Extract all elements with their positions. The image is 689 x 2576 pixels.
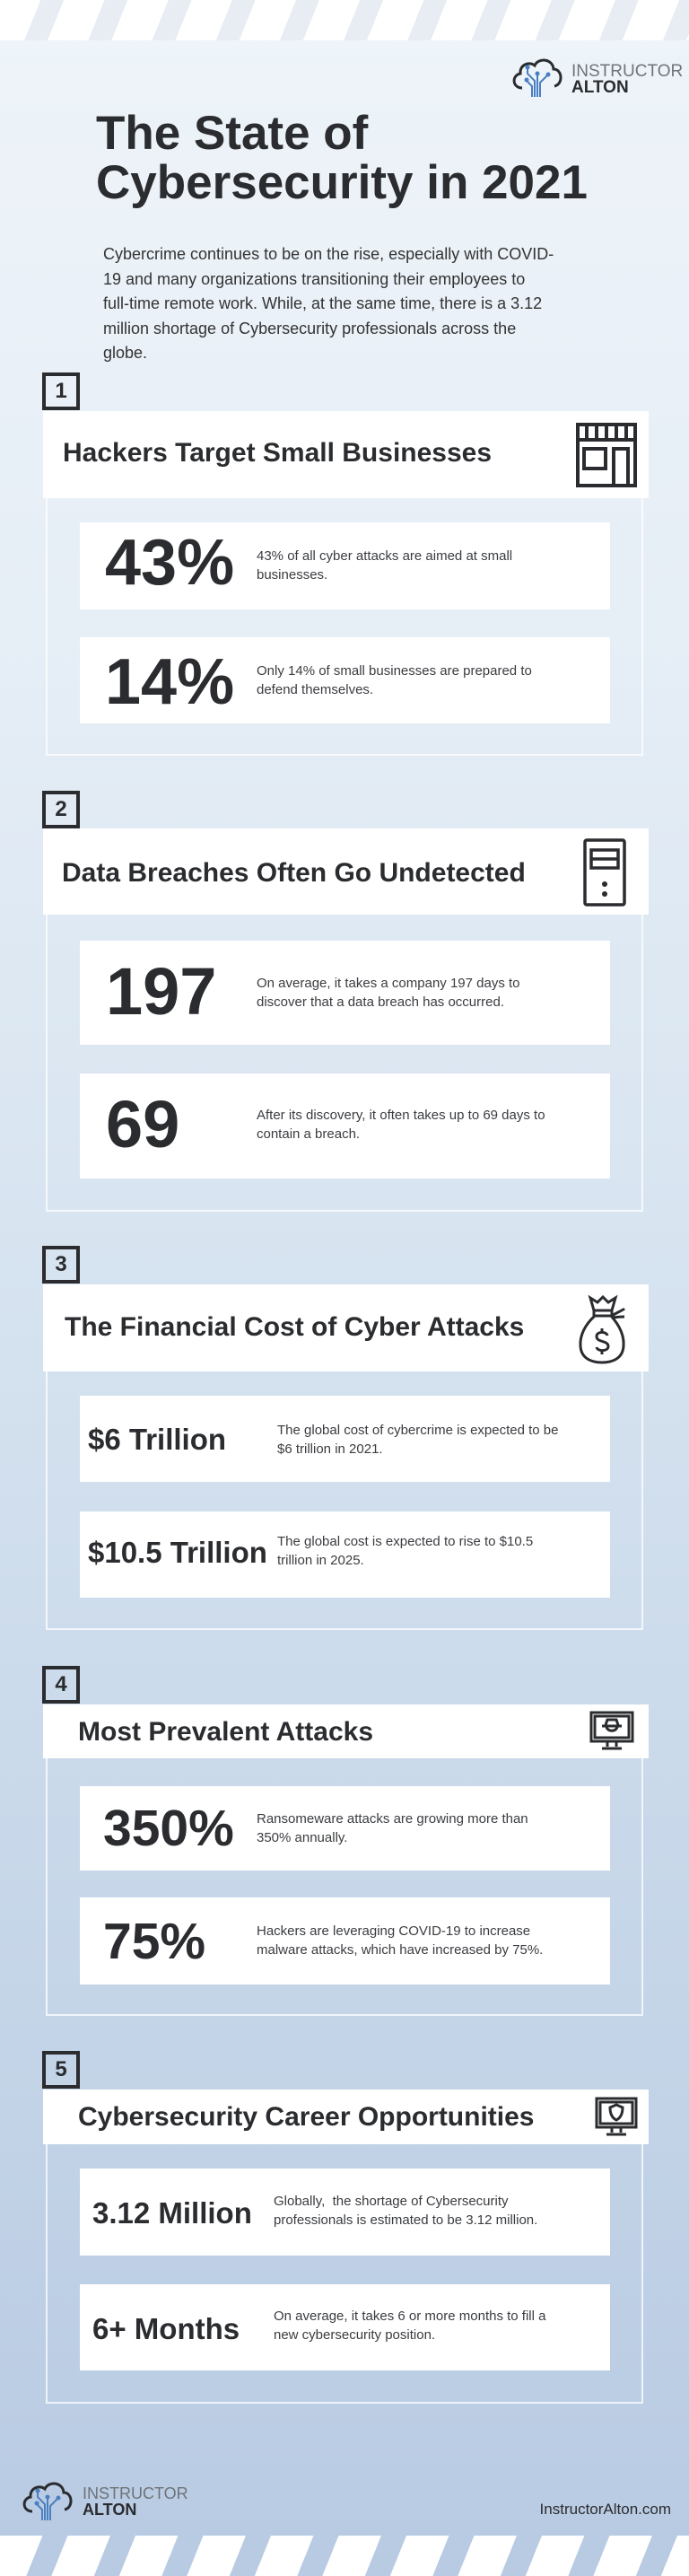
card: 14% [80,637,610,723]
section 1 panel [46,498,643,756]
icon: server [583,838,626,907]
title: Cybersecurity in 2021 [96,156,588,209]
footer logo [23,2483,188,2520]
logo: instructor alton (top): INSTRUCTOR [571,62,683,81]
card: 197 [80,941,610,1045]
logo: instructor alton (top): ALTON [571,78,629,97]
footer website: InstructorAlton.com [540,2501,671,2518]
card: 69 [80,1073,610,1178]
card: $10.5 Trillion: The global cost is expected to rise to $10.5 [277,1534,533,1549]
card: $6 Trillion: $6 Trillion [88,1423,226,1456]
card: 197: discover that a data breach has occurred. [257,994,504,1010]
card: 69: contain a breach. [257,1126,360,1142]
section 4 header: Most Prevalent Attacks [78,1717,373,1747]
intro paragraph [103,245,554,362]
card: 6+ Months: new cybersecurity position. [274,2327,435,2343]
logo: instructor alton (top) [513,59,683,97]
title: The State of [96,107,368,160]
section 1 number [42,372,80,410]
card: 3.12 Million: professionals is estimated to be 3.12 million. [274,2212,537,2228]
card: 6+ Months: On average, it takes 6 or more months to fill a [274,2309,545,2324]
card: 350%: 350% annually. [257,1830,347,1845]
card: 43%: 43% [105,527,234,599]
card: 75% [80,1897,610,1985]
card: 350%: Ransomeware attacks are growing more than [257,1811,528,1827]
footer logo: ALTON [83,2501,136,2519]
icon: store [576,423,637,487]
card: 14%: Only 14% of small businesses are prepared to [257,663,532,679]
bottom stripe band [0,2536,689,2576]
section 3 number [42,1246,80,1284]
icon: money bag [579,1294,625,1364]
icon: monitor hacker [590,1711,633,1750]
card: 14%: defend themselves. [257,682,373,697]
card: 69: 69 [106,1087,179,1161]
section 4 panel [46,1758,643,2016]
section 2 panel [46,915,643,1212]
card: 43%: businesses. [257,567,327,583]
footer logo: INSTRUCTOR [83,2484,188,2502]
card: $10.5 Trillion: trillion in 2025. [277,1553,364,1568]
top stripe band [0,0,689,40]
section 2 number: 2 [55,797,67,821]
intro paragraph: Cybercrime continues to be on the rise, especially with COVID- [103,245,554,263]
card: 3.12 Million: 3.12 Million [92,2196,252,2230]
section 5 header: Cybersecurity Career Opportunities [78,2102,535,2132]
section 4 number [42,1666,80,1704]
card: 43%: 43% of all cyber attacks are aimed at small [257,548,512,564]
card: 69: After its discovery, it often takes up to 69 days to [257,1108,545,1123]
intro paragraph: globe. [103,344,147,362]
card: $6 Trillion: The global cost of cybercrime is expected to be [277,1423,558,1438]
card: $6 Trillion [80,1396,610,1482]
section 2 header [43,828,649,915]
card: $10.5 Trillion: $10.5 Trillion [88,1536,267,1569]
card: 197: 197 [106,954,216,1029]
card: 6+ Months: 6+ Months [92,2312,240,2345]
card: 3.12 Million [80,2169,610,2256]
intro paragraph: 19 and many organizations transitioning their employees to [103,269,525,287]
section 1 number: 1 [55,379,67,403]
section 3 number: 3 [55,1252,67,1276]
card: 75%: malware attacks, which have increased by 75%. [257,1942,543,1958]
card: 350%: 350% [103,1800,234,1857]
section 3 header [43,1284,649,1371]
section 2 number [42,791,80,828]
card: 75%: Hackers are leveraging COVID-19 to increase [257,1923,530,1939]
section 5 number [42,2051,80,2089]
section 1 header: Hackers Target Small Businesses [63,438,492,468]
card: $10.5 Trillion [80,1511,610,1598]
section 4 header [43,1704,649,1758]
section 4 number: 4 [55,1672,67,1696]
section 1 header [43,411,649,498]
intro paragraph: million shortage of Cybersecurity professionals across the [103,320,516,337]
card: 350% [80,1786,610,1871]
card: $6 Trillion: $6 trillion in 2021. [277,1441,383,1457]
card: 14%: 14% [105,646,234,718]
section 5 header [43,2090,649,2144]
section 3 header: The Financial Cost of Cyber Attacks [65,1312,524,1342]
card: 43% [80,522,610,609]
card: 3.12 Million: Globally, the shortage of Cybersecurity [274,2194,509,2209]
section 2 header: Data Breaches Often Go Undetected [62,858,526,888]
section 5 number: 5 [55,2057,67,2081]
section 5 panel [46,2144,643,2404]
card: 75%: 75% [103,1913,205,1970]
section 3 panel [46,1371,643,1630]
card: 197: On average, it takes a company 197 days to [257,976,520,991]
icon: monitor shield [596,2097,637,2136]
card: 6+ Months [80,2284,610,2370]
title [96,107,588,209]
intro paragraph: full-time remote work. While, at the same time, there is a 3.12 [103,294,542,312]
